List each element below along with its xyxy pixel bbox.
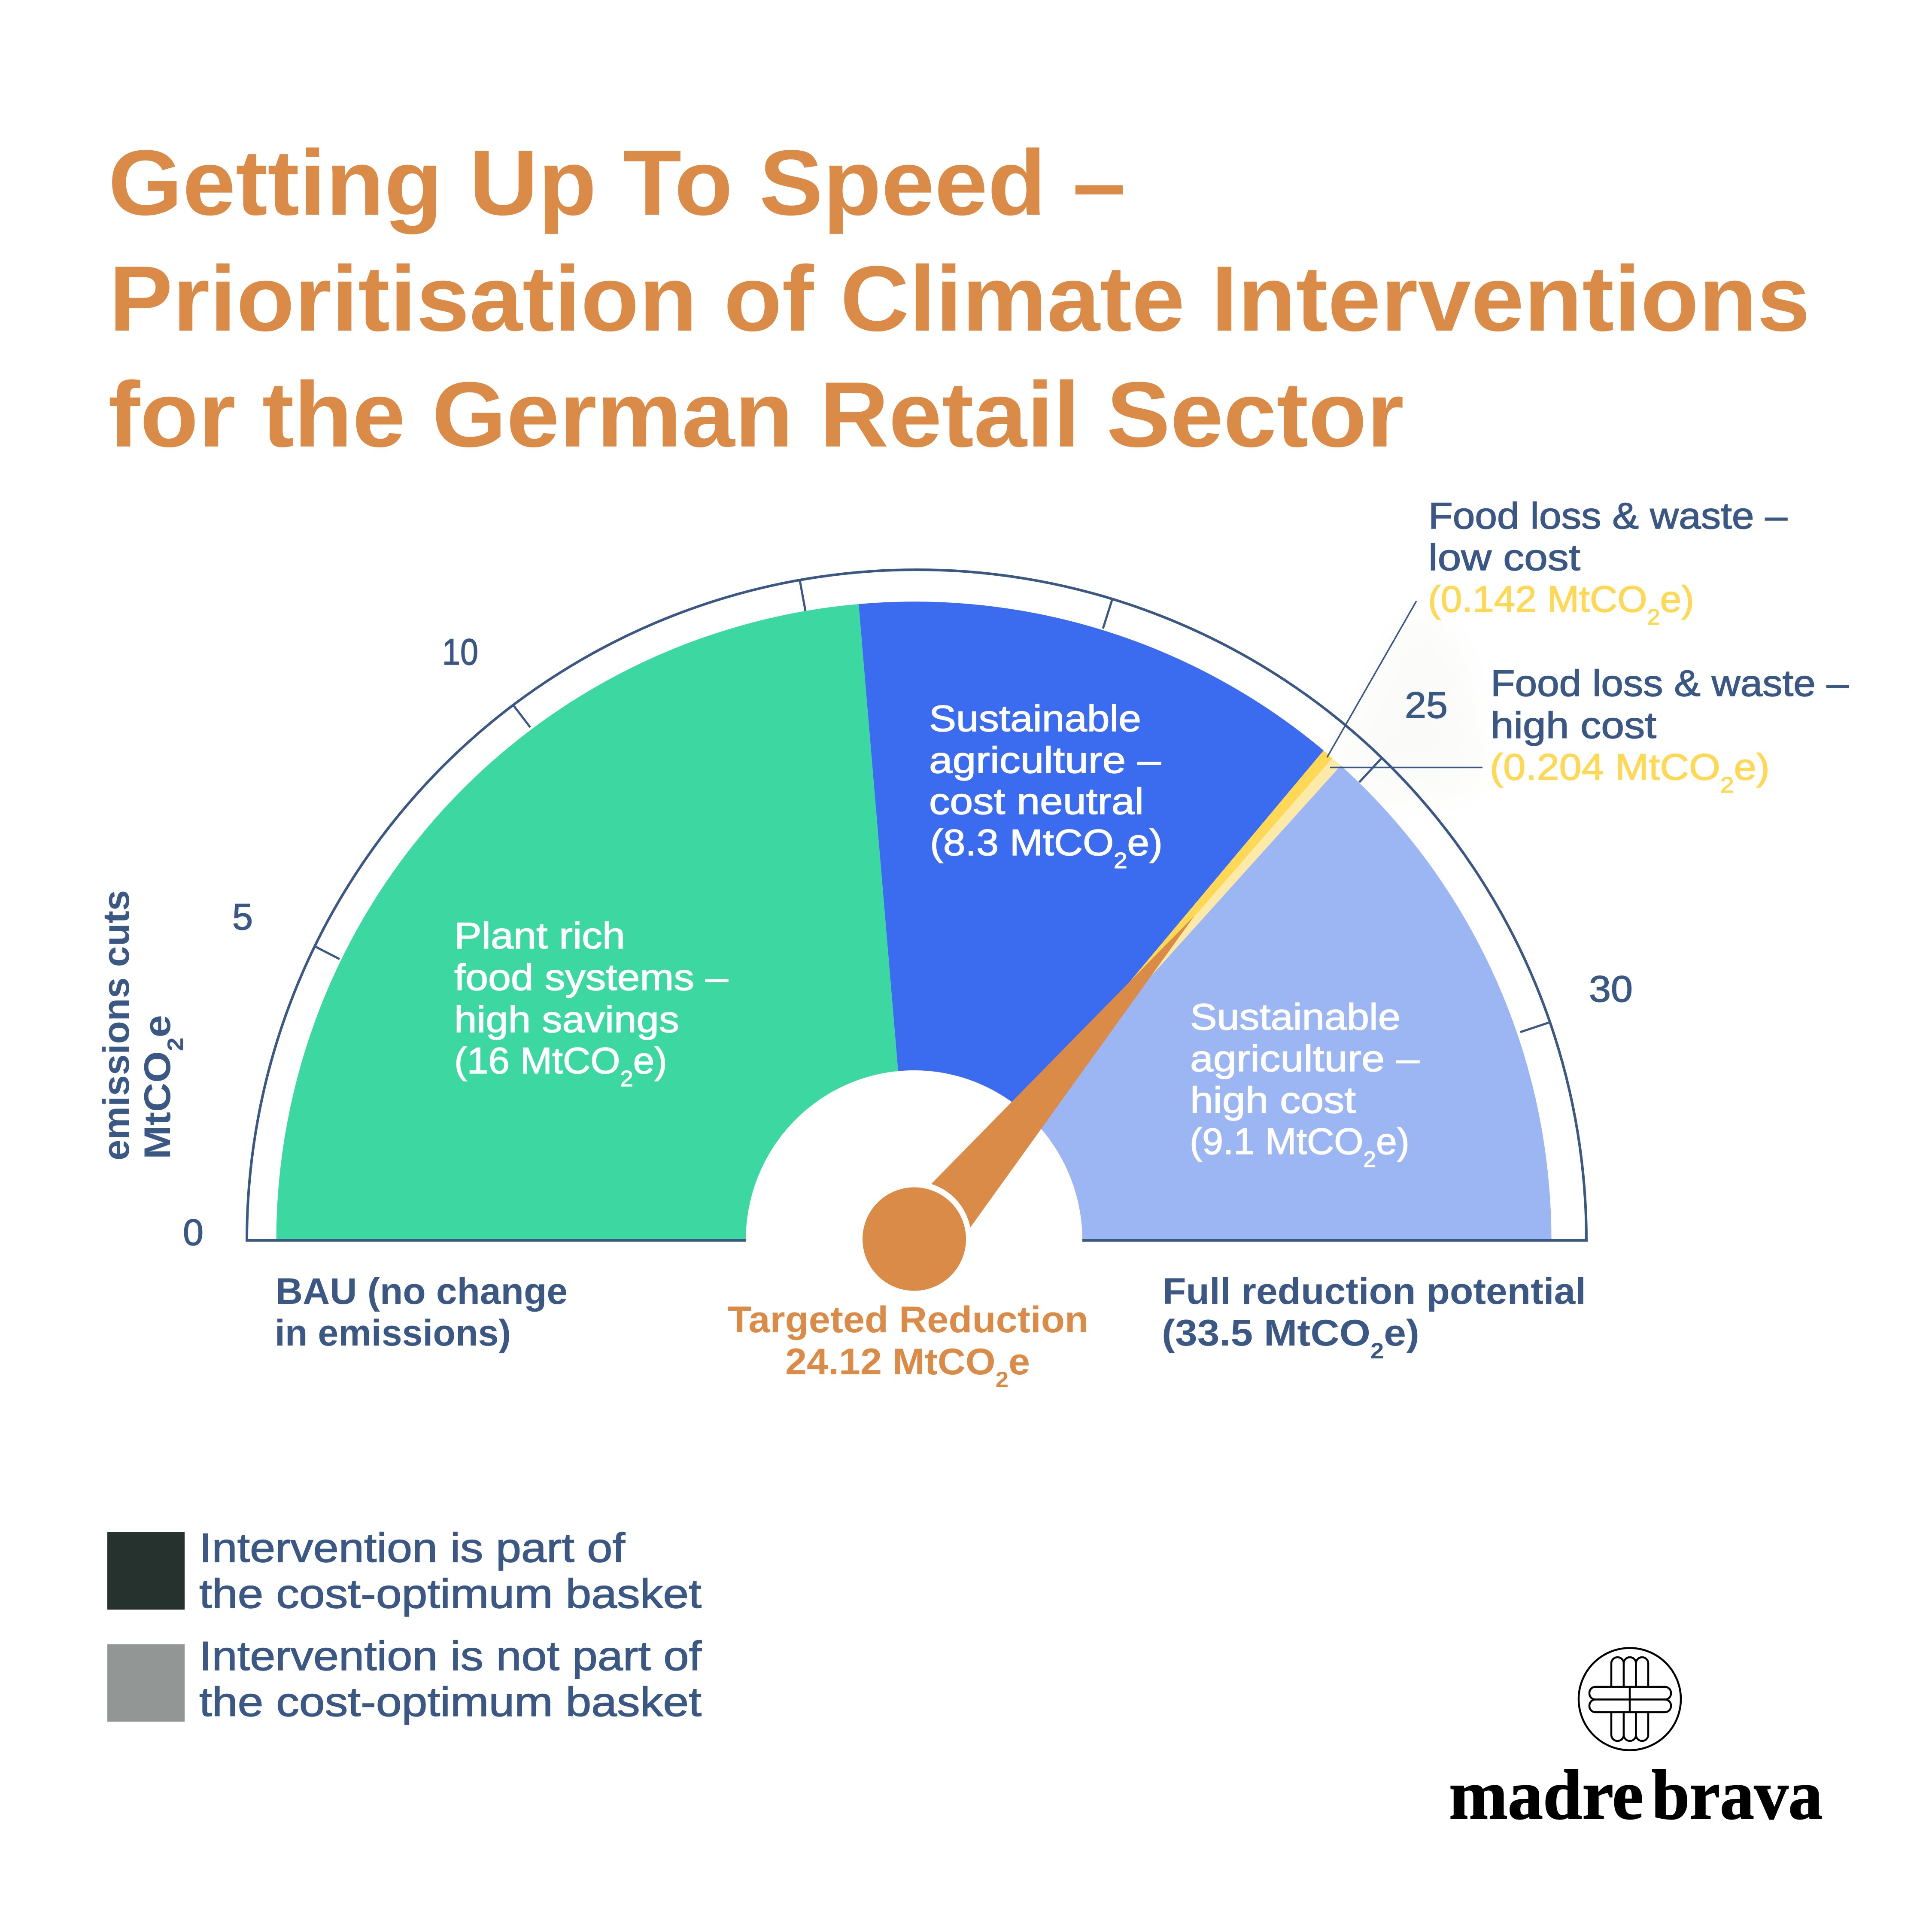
label: cost neutral (929, 698, 1163, 873)
axis tick labels (183, 632, 1633, 1253)
label: high cost: (9.1 MtCO (1190, 1121, 1360, 1162)
needle hub (863, 1188, 966, 1291)
needle (931, 916, 1194, 1227)
axis tick labels: 25 (1405, 685, 1448, 726)
logo wordmark: madre (1449, 1756, 1643, 1834)
wedge: sustainable agriculture high cost (914, 766, 1552, 1239)
label: cost neutral: 2 (1114, 848, 1127, 873)
inner white hub (746, 1070, 1082, 1242)
label: cost neutral: Sustainable (929, 698, 1141, 739)
axis title: emissions cuts (96, 890, 137, 1160)
leader lines (1327, 601, 1482, 768)
title: Prioritisation of Climate Interventions (109, 246, 1810, 350)
legend: in basket: the cost-optimum basket (199, 1571, 702, 1617)
axis title (96, 890, 188, 1160)
label: food loss high cost: e) (1734, 747, 1770, 788)
wedge: plant rich food systems (276, 604, 912, 1239)
label: full reduction potential (1162, 1271, 1586, 1364)
title (108, 131, 1810, 466)
legend: not in basket: Intervention is not part of (199, 1633, 702, 1679)
axis title: MtCO (137, 1061, 178, 1159)
axis tick labels: 0 (183, 1212, 204, 1253)
axis tick labels: 30 (1589, 969, 1633, 1010)
logo wordmark: brava (1652, 1756, 1823, 1834)
label: food loss low cost (1428, 495, 1787, 630)
label: food loss low cost: Food loss & waste – (1428, 495, 1787, 537)
label: targeted reduction: 2 (996, 1367, 1009, 1392)
wedge: food loss low cost (914, 750, 1332, 1239)
label: food loss high cost: high cost (1491, 705, 1656, 746)
label: food loss high cost: 2 (1720, 773, 1734, 798)
label: food loss low cost: low cost (1428, 537, 1580, 578)
legend: in basket: Intervention is part of (199, 1525, 625, 1571)
label: high cost: high cost (1190, 1080, 1356, 1121)
legend: in basket (107, 1525, 702, 1617)
label: targeted reduction: e (1009, 1341, 1030, 1382)
label: targeted reduction: 24.12 MtCO (785, 1341, 986, 1382)
label: food loss high cost: (0.204 MtCO (1490, 747, 1701, 788)
label: high cost: 2 (1364, 1147, 1376, 1172)
label: full reduction potential: 2 (1370, 1339, 1384, 1364)
label: BAU: BAU (no change (276, 1271, 568, 1312)
label: plant rich: e) (633, 1040, 667, 1081)
gauge outer scale (247, 570, 1586, 1240)
label: high cost: e) (1376, 1121, 1410, 1162)
label: plant rich: food systems – (454, 957, 728, 998)
label: food loss high cost (1490, 663, 1849, 798)
label: BAU (275, 1271, 568, 1354)
label: full reduction potential: Full reduction potential (1163, 1271, 1586, 1312)
wedge: food loss high cost (914, 758, 1341, 1239)
label: plant rich: Plant rich (454, 915, 625, 957)
label: plant rich: (16 MtCO (454, 1040, 614, 1081)
axis title: e (137, 1015, 178, 1038)
label: food loss low cost: 2 (1647, 605, 1660, 630)
logo wordmark (1449, 1756, 1823, 1834)
logo emblem (1579, 1648, 1681, 1750)
wedge: sustainable agriculture cost neutral (859, 601, 1324, 1239)
label: high cost: Sustainable (1190, 996, 1400, 1038)
label: plant rich (454, 915, 728, 1091)
label: cost neutral: e) (1127, 822, 1163, 863)
label: BAU: in emissions) (275, 1312, 511, 1354)
label: high cost (1190, 996, 1419, 1172)
label: cost neutral: agriculture – (929, 740, 1161, 781)
legend: not in basket: the cost-optimum basket (199, 1679, 702, 1725)
axis tick labels: 10 (442, 632, 478, 673)
title: for the German Retail Sector (108, 362, 1404, 466)
label: targeted reduction: Targeted Reduction (728, 1299, 1088, 1340)
legend: not in basket (107, 1633, 702, 1725)
label: cost neutral: cost neutral (929, 781, 1144, 822)
label: cost neutral: (8.3 MtCO (930, 822, 1100, 863)
label: food loss low cost: e) (1660, 579, 1694, 620)
label: food loss high cost: Food loss & waste – (1491, 663, 1849, 704)
label: food loss low cost: (0.142 MtCO (1428, 579, 1639, 620)
label: targeted reduction (728, 1299, 1088, 1392)
gauge chart (247, 570, 1586, 1291)
label: high cost: agriculture – (1190, 1038, 1419, 1079)
label: full reduction potential: e) (1384, 1312, 1419, 1354)
axis tick labels: 5 (232, 896, 253, 938)
logo: madre brava (1449, 1648, 1823, 1834)
title: Getting Up To Speed – (108, 131, 1126, 234)
axis title: 2 (163, 1038, 188, 1051)
label: full reduction potential: (33.5 MtCO (1162, 1312, 1355, 1354)
label: plant rich: 2 (620, 1066, 633, 1091)
label: plant rich: high savings (454, 999, 679, 1040)
